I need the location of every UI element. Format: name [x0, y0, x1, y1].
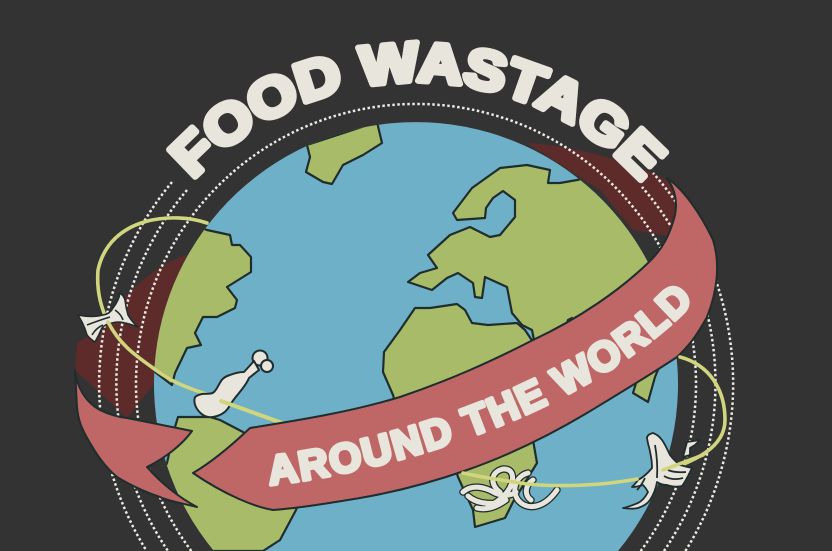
front ribbon: [75, 178, 717, 510]
orbit line: right: [663, 357, 725, 472]
orbit line: lower left: [108, 322, 215, 397]
orbit line: in front of drumstick: [221, 401, 285, 424]
icon: apple core: [78, 293, 138, 342]
back of ribbon: [75, 143, 677, 418]
icon: banana peel: [623, 433, 700, 509]
continent: island: [633, 365, 660, 402]
orbit line: bottom: [463, 473, 637, 486]
orbit line: in front of banana: [663, 455, 703, 470]
ribbon band: [193, 178, 717, 510]
globe: [120, 122, 700, 551]
continent: arctic landmass: [306, 122, 382, 184]
ribbon text: AROUND THE WORLD: [268, 286, 690, 487]
title: FOOD WASTAGE: [166, 39, 670, 184]
continent: north america: [154, 228, 252, 386]
continent: africa: [382, 302, 532, 398]
continent: southern africa: [450, 440, 537, 527]
dotted orbit rings: [99, 104, 733, 551]
continents: [154, 124, 660, 551]
ribbon tail: [75, 370, 197, 507]
orbit line: upper left: [98, 218, 207, 322]
continent: eurasia: [406, 164, 648, 339]
icon: orange peel: [463, 469, 557, 509]
icon: drumstick bone: [194, 350, 273, 417]
continent: south america: [166, 416, 298, 551]
